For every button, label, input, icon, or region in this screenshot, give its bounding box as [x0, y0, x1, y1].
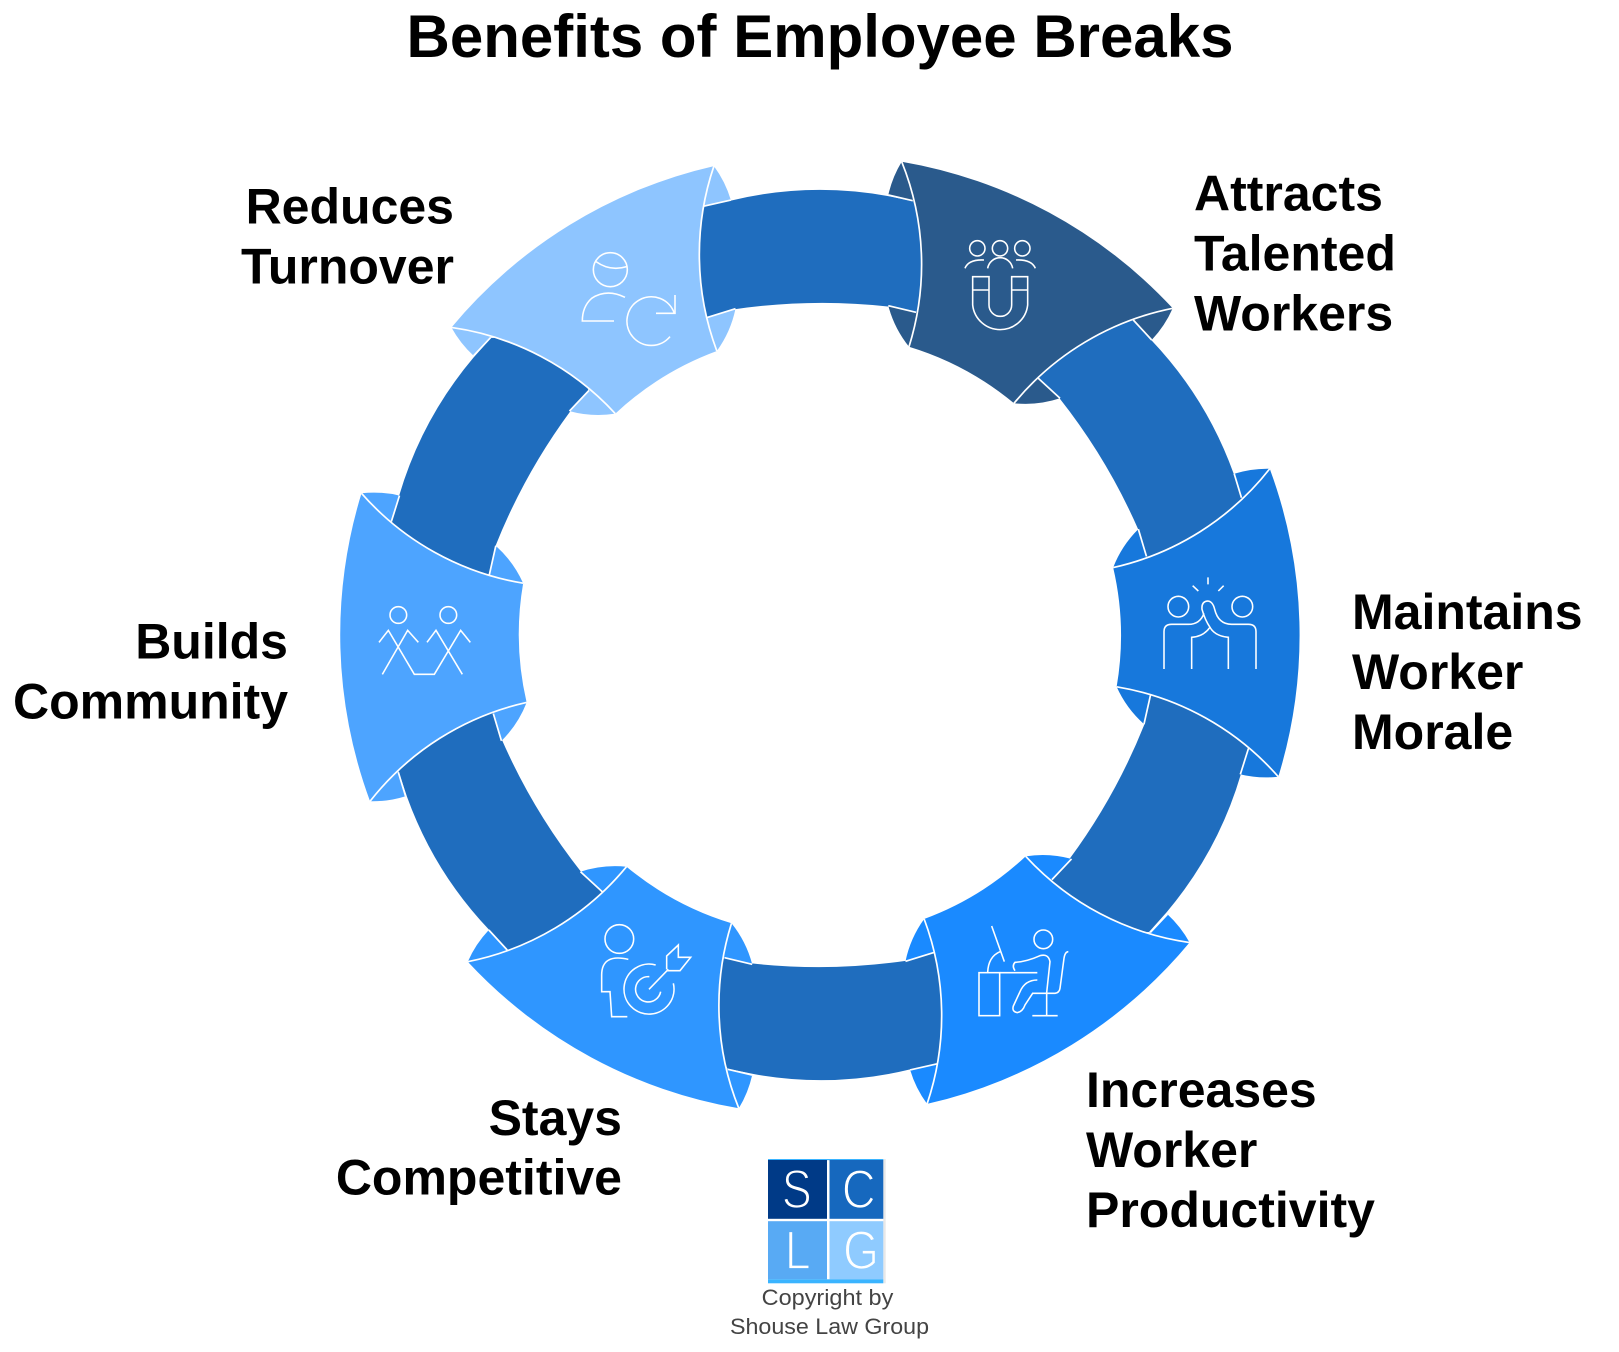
label: maintains worker morale: Worker	[1352, 644, 1523, 700]
icon: high five	[1164, 577, 1256, 669]
label: stays competitive: Stays	[489, 1090, 622, 1146]
label: builds community: Community	[13, 674, 288, 730]
copyright text: Shouse Law Group	[730, 1314, 929, 1339]
segment: builds community	[235, 445, 587, 813]
copyright text	[730, 1285, 929, 1339]
label: maintains worker morale: Maintains	[1352, 584, 1583, 640]
ring connectors	[337, 112, 1303, 1158]
label: increases worker productivity: Productivity	[1086, 1182, 1375, 1238]
segment: increases worker productivity	[844, 810, 1196, 1177]
icon: person at desk	[979, 926, 1068, 1016]
logo: SCLG: C	[842, 1158, 876, 1220]
label: increases worker productivity: Increases	[1086, 1062, 1317, 1118]
label: increases worker productivity: Worker	[1086, 1122, 1257, 1178]
logo: SCLG: L	[785, 1219, 811, 1281]
label: reduces turnover: Turnover	[241, 238, 454, 294]
icon: two people holding hands	[379, 607, 470, 674]
icon: people and magnet	[965, 241, 1035, 330]
title: Benefits of Employee Breaks	[407, 3, 1233, 70]
label: stays competitive: Competitive	[336, 1150, 622, 1206]
logo: SCLG: G	[843, 1219, 879, 1281]
logo: SCLG: S	[782, 1158, 812, 1220]
icon: person with refresh arrow	[582, 253, 675, 345]
label: attracts talented workers: Workers	[1194, 286, 1393, 342]
label: attracts talented workers: Attracts	[1194, 166, 1383, 222]
label: attracts talented workers: Talented	[1194, 226, 1396, 282]
label: reduces turnover: Reduces	[246, 178, 454, 234]
logo: SCLG	[768, 1158, 886, 1283]
segment: stays competitive	[468, 866, 752, 1108]
icon: person with target	[602, 925, 691, 1017]
segment: reduces turnover	[445, 93, 797, 460]
segment: attracts talented workers	[888, 162, 1173, 404]
label: maintains worker morale: Morale	[1352, 704, 1513, 760]
segment: maintains worker morale	[1053, 457, 1405, 825]
label: builds community: Builds	[135, 614, 288, 670]
copyright text: Copyright by	[762, 1285, 894, 1310]
